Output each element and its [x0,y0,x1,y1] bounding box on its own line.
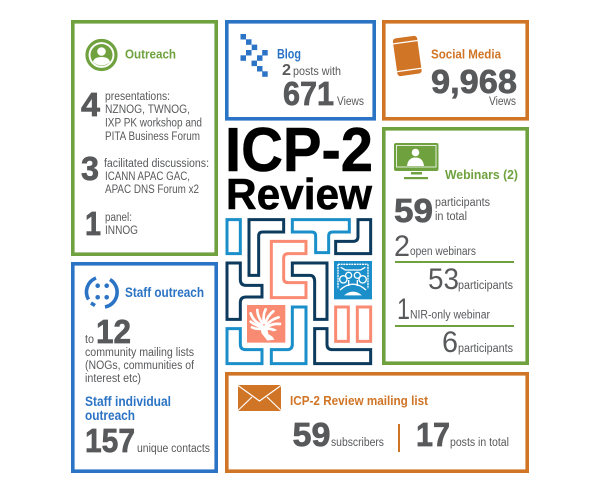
stat: to 12 mailing lists: interest etc) [85,373,141,385]
stat: 4 presentations: presentations: [105,91,170,103]
stat: 17 posts in total [416,416,509,453]
panel: outreach [73,22,216,254]
stat: 157 unique contacts: unique contacts [137,443,210,455]
stat: 2 open webinars: 2 [394,230,410,263]
stat: 2 posts with 671 views [282,62,364,112]
heading: outreach: Outreach [125,46,176,62]
heading: mailing list: ICP-2 Review mailing list [290,393,429,408]
maze logo [227,220,372,364]
panel: webinars [384,129,527,363]
stat: to 12 mailing lists [85,313,195,385]
stat: 1 NIR-only webinar: 1 [397,293,410,326]
stat: 157 unique contacts [85,422,210,459]
stat: 59 participants in total: in total [435,211,467,223]
stat: 3 facilitated discussions: facilitated discussions: [104,158,209,170]
heading: staff outreach: Staff outreach [125,285,204,300]
stat: 59 subscribers: subscribers [331,437,384,449]
stat: 6 participants: participants [458,343,513,355]
stat: 2 open webinars [394,230,476,263]
title [225,116,373,219]
stat: 9,968 views: 9,968 [431,63,517,100]
stat: 17 posts in total: posts in total [450,437,509,449]
stat: 3 facilitated discussions: 3 [81,150,99,187]
stat: 3 facilitated discussions: APAC DNS Forum x2 [105,184,199,196]
stat: 59 participants in total [394,192,490,229]
stat: 59 participants in total: 59 [394,192,433,229]
stat: 17 posts in total: 17 [416,416,450,453]
panel: mailing list [227,374,527,471]
icon: staff outreach dots [86,278,117,307]
stat: 59 subscribers [292,416,384,453]
stat: 1 panel: panel: [105,212,132,224]
stat: 1 NIR-only webinar [397,293,490,326]
emblem: swirl [247,305,285,343]
stat: 1 panel: INNOG [105,225,138,237]
heading: staff individual outreach: outreach [85,408,135,423]
heading: webinars: Webinars (2) [445,167,518,182]
stat: 1 NIR-only webinar: NIR-only webinar [410,310,490,322]
panel: social media [384,22,527,119]
emblem: mask [334,261,372,299]
stat: 53 participants: participants [458,280,513,292]
stat: 4 presentations [81,86,202,143]
heading: blog: Blog [277,47,301,62]
icon: blog pixels [240,34,268,77]
stat: 9,968 views: Views [489,96,516,108]
panel: blog [227,22,374,119]
stat: 4 presentations: PITA Business Forum [105,131,200,143]
stat: 2 posts with 671 views: 671 [283,75,334,112]
title: Review [226,170,373,219]
stat: 53 participants [428,263,513,296]
stat: 1 panel [85,205,138,242]
stat: 59 participants in total: participants [435,197,490,209]
panel: staff outreach [73,264,216,471]
stat: 1 panel: 1 [85,205,101,242]
stat: 2 posts with 671 views: posts with [293,64,341,78]
heading: social media: Social Media [431,47,502,62]
stat: 59 subscribers: 59 [292,416,330,453]
icon: envelope [238,385,281,411]
stat: 2 posts with 671 views: Views [337,96,364,108]
stat: 4 presentations: IXP PK workshop and [105,118,202,130]
icon: person in circle [87,40,116,70]
stat: to 12 mailing lists: to [85,334,94,346]
stat: 157 unique contacts: 157 [85,422,135,459]
heading: staff individual outreach: Staff individual [85,394,171,409]
icon: monitor with person [394,143,438,179]
stat: 3 facilitated discussions [81,150,209,196]
stat: to 12 mailing lists: (NOGs, communities of [85,360,195,372]
stat: 4 presentations: 4 [81,86,101,123]
stat: 53 participants: 53 [428,263,459,296]
icon: phone [392,35,422,76]
stat: to 12 mailing lists: community mailing lists [85,347,194,359]
stat: 6 participants: 6 [442,326,458,359]
stat: 4 presentations: NZNOG, TWNOG, [105,104,190,116]
heading: staff individual outreach [85,394,171,423]
stat: 3 facilitated discussions: ICANN APAC GAC, [105,171,190,183]
stat: to 12 mailing lists: 12 [96,313,131,350]
title: ICP-2 [225,116,373,185]
stat: 2 open webinars: open webinars [410,246,476,258]
stat: 2 posts with 671 views: 2 [282,62,291,79]
stat: 6 participants [442,326,513,359]
